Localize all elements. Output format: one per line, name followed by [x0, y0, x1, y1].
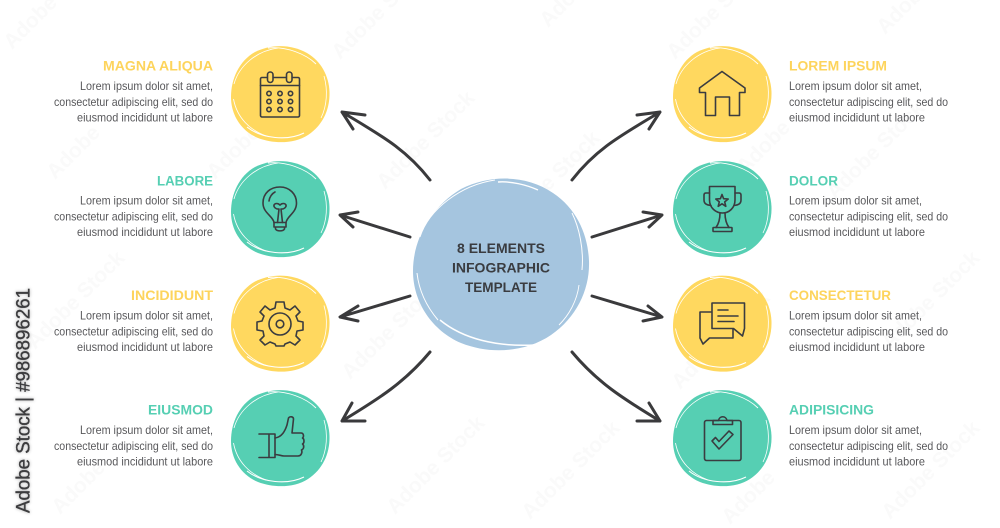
icon: speech bubbles	[700, 303, 744, 344]
heading: LABORE	[157, 173, 213, 188]
arrow: upper middle right	[592, 212, 662, 237]
body text: Lorem ipsum dolor sit amet,	[789, 308, 922, 322]
watermark: Adobe Stock pattern: Adobe Stock	[667, 286, 775, 394]
icon: gear	[257, 302, 303, 346]
body text: consectetur adipiscing elit, sed do	[789, 324, 948, 338]
body text	[54, 308, 213, 354]
panel: labore	[54, 161, 330, 257]
body text: eiusmod incididunt ut labore	[77, 225, 213, 239]
yellow circle	[673, 276, 772, 372]
arrow: top left	[342, 112, 430, 180]
watermark: Adobe Stock pattern: Adobe Stock	[517, 416, 625, 524]
body text: eiusmod incididunt ut labore	[789, 454, 925, 468]
center title	[452, 241, 550, 295]
panel: dolor	[673, 161, 948, 257]
arrow: lower middle right	[592, 296, 662, 321]
body text: consectetur adipiscing elit, sed do	[54, 439, 213, 453]
heading: MAGNA ALIQUA	[103, 58, 213, 74]
teal circle	[231, 161, 330, 257]
panel: magna aliqua	[54, 46, 330, 142]
yellow circle	[673, 46, 772, 142]
body text	[789, 79, 948, 124]
teal circle	[231, 390, 330, 486]
watermark: Adobe Stock pattern: Adobe	[47, 456, 110, 519]
icon: light bulb	[263, 187, 296, 231]
center title: 8 ELEMENTS	[457, 241, 545, 256]
watermark: Adobe Stock pattern: Adobe	[42, 121, 105, 184]
body text: eiusmod incididunt ut labore	[789, 340, 925, 354]
watermark: Adobe Stock pattern: Adobe Stock	[382, 411, 490, 519]
watermark: Adobe Stock pattern: Adobe Stock	[337, 276, 445, 384]
body text: Lorem ipsum dolor sit amet,	[789, 194, 922, 208]
heading: LOREM IPSUM	[789, 58, 887, 74]
body text: consectetur adipiscing elit, sed do	[789, 439, 948, 453]
heading: EIUSMOD	[148, 402, 213, 418]
watermark: Adobe Stock pattern: Adobe Stock	[822, 96, 930, 204]
heading: DOLOR	[789, 173, 838, 188]
body text: consectetur adipiscing elit, sed do	[54, 210, 213, 224]
panel: consectetur	[673, 276, 948, 372]
yellow circle	[231, 276, 330, 372]
arrow: upper middle left	[340, 212, 410, 237]
body text: eiusmod incididunt ut labore	[789, 225, 925, 239]
body text	[789, 308, 948, 354]
side credit text: Adobe Stock | #986896261	[12, 288, 34, 513]
body text	[54, 194, 213, 239]
watermark: Adobe Stock pattern: Adobe Stock	[372, 86, 480, 194]
heading: INCIDIDUNT	[131, 288, 214, 303]
body text: consectetur adipiscing elit, sed do	[789, 95, 948, 109]
body text	[54, 423, 213, 468]
watermark: Adobe Stock pattern: Adobe Stock	[202, 76, 310, 184]
teal circle	[673, 161, 772, 257]
panel: lorem ipsum	[673, 46, 948, 142]
arrow: bottom left	[342, 352, 430, 421]
body text: Lorem ipsum dolor sit amet,	[789, 423, 922, 437]
body text	[789, 423, 948, 468]
arrow: bottom right	[572, 352, 660, 421]
arrow: lower middle left	[340, 296, 410, 321]
watermark: Adobe Stock pattern: Adobe	[717, 466, 780, 528]
panel: incididunt	[54, 276, 330, 372]
watermark: Adobe Stock pattern: Adobe Stock	[22, 246, 130, 354]
body text: consectetur adipiscing elit, sed do	[54, 324, 213, 338]
icon: clipboard	[704, 417, 741, 460]
watermark: Adobe Stock pattern: Adobe Stock	[877, 416, 985, 524]
panel: eiusmod	[54, 390, 330, 486]
body text: eiusmod incididunt ut labore	[77, 340, 213, 354]
teal circle	[673, 390, 772, 486]
body text: Lorem ipsum dolor sit amet,	[80, 308, 213, 322]
body text: Lorem ipsum dolor sit amet,	[80, 194, 213, 208]
icon: thumbs up	[259, 417, 304, 458]
watermark: Adobe Stock pattern: Adobe	[732, 116, 795, 179]
icon: house	[700, 72, 745, 116]
body text: consectetur adipiscing elit, sed do	[54, 95, 213, 109]
body text	[789, 194, 948, 239]
heading: ADIPISICING	[789, 402, 874, 418]
panel: adipisicing	[673, 390, 948, 486]
heading: CONSECTETUR	[789, 288, 891, 303]
icon: calendar	[260, 72, 300, 117]
body text: Lorem ipsum dolor sit amet,	[80, 79, 213, 93]
body text: eiusmod incididunt ut labore	[77, 454, 213, 468]
center title: TEMPLATE	[465, 280, 537, 295]
body text	[54, 79, 213, 124]
body text: Lorem ipsum dolor sit amet,	[789, 79, 922, 93]
watermark: Adobe Stock pattern: Adobe Stock	[877, 246, 985, 354]
body text: Lorem ipsum dolor sit amet,	[80, 423, 213, 437]
icon: trophy	[704, 186, 741, 232]
body text: consectetur adipiscing elit, sed do	[789, 210, 948, 224]
arrow: top right	[572, 112, 660, 180]
body text: eiusmod incididunt ut labore	[77, 110, 213, 124]
body text: eiusmod incididunt ut labore	[789, 110, 925, 124]
yellow circle	[231, 46, 330, 142]
center circle with title	[413, 179, 589, 350]
watermark: Adobe Stock pattern: Adobe Stock	[497, 126, 605, 234]
center title: INFOGRAPHIC	[452, 260, 550, 276]
